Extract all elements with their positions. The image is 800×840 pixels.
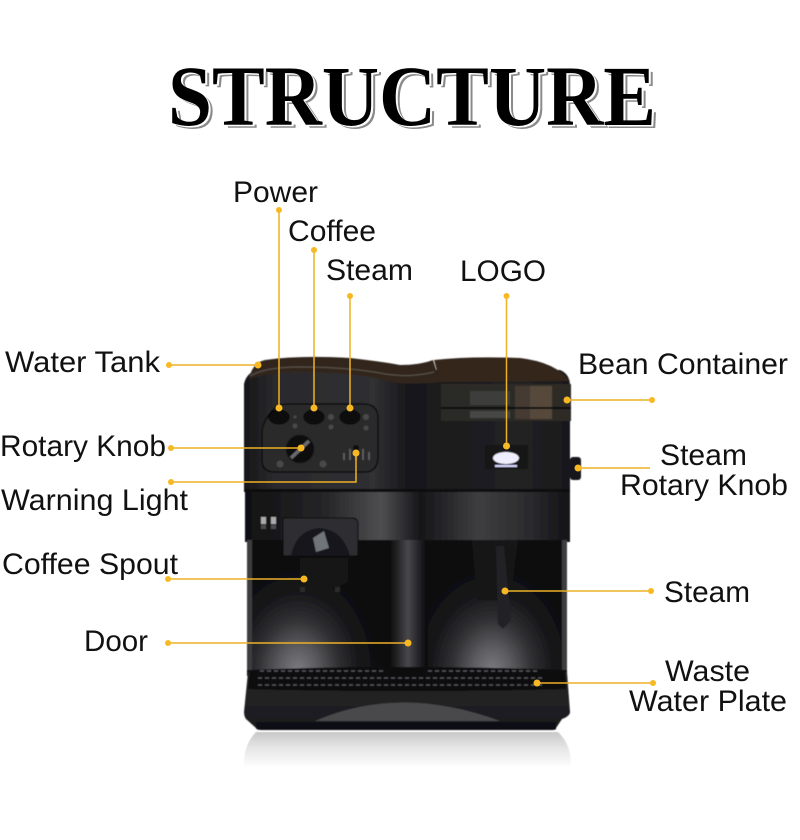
cavity glows (252, 570, 561, 671)
label: Waste Water Plate: Waste (665, 655, 750, 688)
warning label (344, 449, 369, 460)
callout dots (165, 207, 656, 686)
label: Steam Rotary Knob (620, 439, 788, 502)
logo display (485, 445, 528, 469)
rotary knob dial (286, 435, 314, 463)
control panel (262, 404, 378, 472)
bean hopper window (441, 384, 571, 421)
mid band (245, 491, 570, 542)
reflection (244, 732, 571, 768)
bean container lid (434, 357, 570, 382)
drip tray (244, 668, 570, 728)
label: Coffee Spout: Coffee Spout (2, 548, 179, 581)
steam wand mount (472, 540, 518, 600)
label: LOGO: LOGO (460, 255, 546, 288)
buttons (269, 410, 360, 424)
label: Steam wand: Steam (664, 576, 750, 609)
steam wand (496, 546, 511, 629)
label: Rotary Knob: Rotary Knob (0, 430, 166, 463)
label: Power: Power (233, 176, 318, 209)
coffee spout (300, 558, 348, 587)
label: Coffee: Coffee (288, 215, 376, 248)
label: Waste Water Plate (629, 655, 787, 718)
title: STRUCTURE (170, 50, 658, 146)
label: Steam button: Steam (326, 254, 413, 287)
central column (388, 540, 428, 675)
label: Steam Rotary Knob: Steam (660, 439, 747, 472)
coffee spout head (283, 518, 358, 556)
drip grille (248, 667, 566, 691)
title: STRUCTURE (172, 51, 660, 147)
upper body (244, 370, 570, 492)
callout lines (168, 210, 653, 683)
cup icons (261, 517, 266, 524)
water tank lid (249, 357, 440, 384)
coffee machine (218, 357, 581, 777)
steam rotary knob (570, 457, 581, 480)
label: Steam Rotary Knob: Rotary Knob (620, 469, 788, 502)
label: Waste Water Plate: Water Plate (629, 685, 787, 718)
label: Bean Container: Bean Container (578, 348, 788, 381)
label: Door: Door (84, 625, 148, 658)
label: Warning Light: Warning Light (1, 484, 189, 517)
title: STRUCTURE (168, 48, 656, 144)
label: Water Tank: Water Tank (5, 346, 161, 379)
lower cavity (247, 540, 567, 676)
